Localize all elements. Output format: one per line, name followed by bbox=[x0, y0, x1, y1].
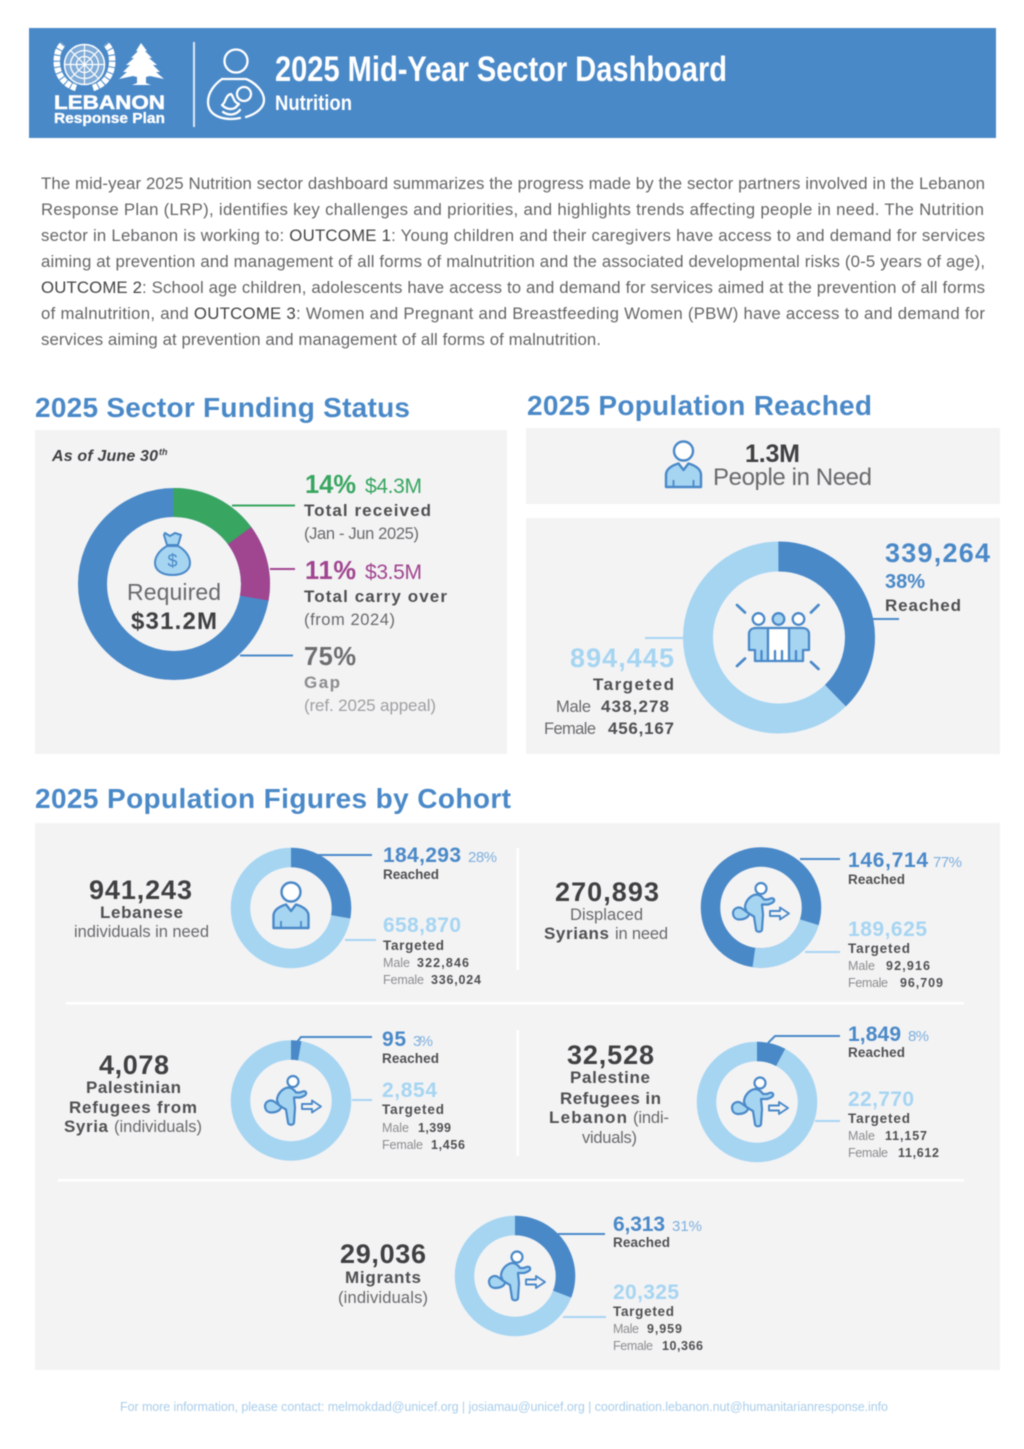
callout: targeted: 894,445 bbox=[570, 643, 674, 673]
cohort: Palestine Refugees in Lebanon bbox=[549, 1023, 939, 1160]
cohort: Palestinian Refugees from Syria: Male bbox=[382, 1121, 409, 1135]
cohort: Lebanese: Targeted bbox=[383, 938, 444, 953]
cohort: Displaced Syrians: Targeted bbox=[848, 941, 910, 956]
panel: cohorts bbox=[35, 823, 1000, 1370]
cohort: Displaced Syrians: Female bbox=[848, 976, 888, 990]
callout: received: 14% bbox=[305, 471, 356, 499]
cohort: Displaced Syrians: 146,714 bbox=[848, 849, 928, 872]
cohort: Palestine Refugees in Lebanon: Reached bbox=[848, 1045, 905, 1060]
intro text block: OUTCOME 2: School age children, adolescents have access to and demand for services aimed at the prevention of all forms bbox=[41, 278, 985, 297]
cohort: Palestine Refugees in Lebanon: Female bbox=[848, 1146, 888, 1160]
cohort: Palestinian Refugees from Syria: 4,078 bbox=[99, 1050, 169, 1080]
cohort: Migrants bbox=[338, 1213, 703, 1353]
cohort: Palestine Refugees in Lebanon: 8% bbox=[908, 1028, 929, 1045]
cohort: Palestinian Refugees from Syria: Female bbox=[382, 1138, 423, 1152]
icon: runner bbox=[733, 883, 789, 932]
donut: Lebanese bbox=[240, 858, 342, 958]
intro text block: sector in Lebanon is working to: OUTCOME 1: Young children and their caregivers have access to and demand for services bbox=[41, 226, 985, 245]
heading: funding status: 2025 Sector Funding Status bbox=[35, 392, 410, 423]
callout: targeted: 438,278 bbox=[601, 697, 669, 716]
callout: targeted: 456,167 bbox=[608, 719, 674, 738]
callout: received: Total received bbox=[304, 501, 431, 520]
intro text block: aiming at prevention and management of all forms of malnutrition and the associated developmental risks (0-5 years of age), bbox=[41, 252, 985, 271]
funding donut chart bbox=[60, 470, 288, 698]
icon: runner bbox=[489, 1252, 545, 1300]
callout: received: (Jan - Jun 2025) bbox=[304, 525, 419, 543]
icon: UN emblem bbox=[57, 44, 112, 88]
callout: reached: 339,264 bbox=[885, 538, 990, 568]
heading: cohorts: 2025 Population Figures by Cohort bbox=[35, 783, 511, 814]
date note suffix: th bbox=[159, 447, 168, 457]
cohort: Palestine Refugees in Lebanon: 11,612 bbox=[898, 1146, 939, 1160]
cohort: Palestinian Refugees from Syria: 2,854 bbox=[382, 1079, 437, 1102]
callout: targeted: Targeted bbox=[593, 675, 674, 694]
cohort: Displaced Syrians: Syrians bbox=[544, 924, 609, 943]
center label: Required bbox=[127, 579, 221, 605]
cohort: Lebanese: Female bbox=[383, 973, 424, 987]
callout: gap: Gap bbox=[304, 673, 340, 692]
cohort: Displaced Syrians: Displaced bbox=[570, 906, 643, 924]
callout: reached: 38% bbox=[885, 571, 925, 593]
footer contact line: For more information, please contact: melmokdad@unicef.org | josiamau@unicef.org | coordination.lebanon.nut@humanitarianresponse.info bbox=[120, 1400, 888, 1414]
cohort: Displaced Syrians: 96,709 bbox=[900, 976, 943, 990]
icon: dollar sign: $ bbox=[167, 551, 178, 571]
cohort: Palestinian Refugees from Syria: 3% bbox=[413, 1033, 433, 1050]
cohort: Palestinian Refugees from Syria: 1,399 bbox=[418, 1121, 451, 1135]
cohort: Lebanese: 658,870 bbox=[383, 914, 461, 937]
cohort: Palestinian Refugees from Syria: 95 bbox=[382, 1028, 406, 1051]
callout: reached bbox=[873, 538, 990, 619]
cohort: Displaced Syrians: 270,893 bbox=[555, 877, 659, 907]
cohort: Palestinian Refugees from Syria bbox=[64, 1028, 465, 1152]
cohort: Displaced Syrians: Reached bbox=[848, 872, 905, 887]
callout: carry over: (from 2024) bbox=[304, 611, 395, 629]
icon: runner bbox=[732, 1078, 788, 1126]
heading: population reached: 2025 Population Reached bbox=[527, 390, 872, 421]
callout: targeted: Male bbox=[556, 698, 591, 716]
cohort: Migrants: 31% bbox=[672, 1218, 702, 1235]
cohort: Lebanese bbox=[74, 844, 497, 987]
callout: gap bbox=[240, 643, 436, 715]
header banner bbox=[29, 28, 996, 138]
cohort: Lebanese: 941,243 bbox=[89, 875, 192, 905]
cohort: Lebanese: 322,846 bbox=[417, 956, 469, 970]
cohort: Palestine Refugees in Lebanon: Lebanon bbox=[549, 1108, 627, 1127]
cohort: Palestine Refugees in Lebanon: Targeted bbox=[848, 1111, 910, 1126]
cohort: Displaced Syrians: 77% bbox=[933, 854, 962, 871]
cohort: Palestine Refugees in Lebanon: Refugees in bbox=[560, 1089, 661, 1108]
panel: people in need bbox=[526, 428, 1000, 504]
intro text block: The mid-year 2025 Nutrition sector dashboard summarizes the progress made by the sector partners involved in the Lebanon bbox=[41, 174, 985, 193]
donut: Palestinian Refugees from Syria bbox=[240, 1050, 342, 1151]
cohort: Migrants: 10,366 bbox=[662, 1339, 703, 1353]
cohort: Lebanese: Male bbox=[383, 956, 410, 970]
logo text: LEBANON bbox=[54, 93, 165, 114]
cohort: Migrants: 29,036 bbox=[340, 1239, 426, 1269]
intro text block: services aiming at prevention and management of all forms of malnutrition. bbox=[41, 330, 601, 349]
cohort: Palestine Refugees in Lebanon: Palestine bbox=[570, 1068, 650, 1087]
cohort: Palestine Refugees in Lebanon: 1,849 bbox=[848, 1023, 901, 1046]
cohort: Palestinian Refugees from Syria: Reached bbox=[382, 1051, 439, 1066]
date note: As of June 30 bbox=[51, 448, 158, 465]
cohort: Displaced Syrians bbox=[544, 844, 962, 990]
cohort: Lebanese: 336,024 bbox=[431, 973, 481, 987]
subtitle: Nutrition bbox=[275, 91, 352, 115]
icon: cedar tree bbox=[119, 43, 164, 85]
intro text block: of malnutrition, and OUTCOME 3: Women and Pregnant and Breastfeeding Women (PBW) have access to and demand for bbox=[41, 304, 985, 323]
callout: carry over: $3.5M bbox=[365, 561, 422, 584]
callout: targeted bbox=[544, 638, 683, 738]
population donut chart bbox=[698, 556, 860, 718]
donut: Displaced Syrians bbox=[698, 844, 824, 971]
divider bbox=[193, 42, 195, 127]
panel: funding status bbox=[35, 430, 507, 754]
intro text block bbox=[41, 174, 985, 349]
callout: reached: Reached bbox=[885, 596, 961, 615]
icon: money bag bbox=[155, 533, 190, 575]
cohort: Migrants: Female bbox=[613, 1339, 653, 1353]
cohort: Palestinian Refugees from Syria: Syria bbox=[64, 1117, 109, 1136]
intro text block: Response Plan (LRP), identifies key challenges and priorities, and highlights trends affecting people in need. The Nutrition bbox=[41, 200, 984, 219]
cohort: Lebanese: individuals in need bbox=[74, 923, 209, 941]
title: 2025 Mid-Year Sector Dashboard bbox=[275, 50, 727, 89]
cohort: Displaced Syrians: 189,625 bbox=[848, 918, 927, 941]
cohort: Palestine Refugees in Lebanon: 22,770 bbox=[848, 1088, 914, 1111]
icon: group of people bbox=[737, 605, 818, 669]
cohort: Palestinian Refugees from Syria: 1,456 bbox=[431, 1138, 465, 1152]
icon: nutrition mother and baby bbox=[208, 50, 264, 119]
panel: population reached bbox=[526, 518, 1000, 754]
cohort: Migrants: Migrants bbox=[345, 1268, 421, 1287]
cohort: Displaced Syrians: Male bbox=[848, 959, 875, 973]
callout: targeted: Female bbox=[544, 720, 596, 738]
cohort: Lebanese: Reached bbox=[383, 867, 439, 882]
cohort: Migrants: 9,959 bbox=[647, 1322, 682, 1336]
people in need label: People in Need bbox=[713, 464, 872, 491]
cohort: Palestine Refugees in Lebanon: Male bbox=[848, 1129, 875, 1143]
cohort: Migrants: Targeted bbox=[613, 1304, 674, 1319]
center value: $31.2M bbox=[131, 608, 217, 635]
callout: received bbox=[232, 471, 431, 543]
cohort: Palestine Refugees in Lebanon: 32,528 bbox=[567, 1040, 654, 1070]
callout: carry over: 11% bbox=[305, 557, 356, 585]
callout: received: $4.3M bbox=[365, 475, 422, 498]
cohort: Palestinian Refugees from Syria: Targeted bbox=[382, 1102, 444, 1117]
cohort: Displaced Syrians: 92,916 bbox=[886, 959, 930, 973]
cohort: Migrants: Reached bbox=[613, 1235, 670, 1250]
people in need value: 1.3M bbox=[745, 440, 800, 468]
donut: Palestine Refugees in Lebanon bbox=[706, 1052, 808, 1152]
cohort: Lebanese: Lebanese bbox=[100, 903, 183, 922]
cohort: Migrants: Male bbox=[613, 1322, 639, 1336]
icon: person bbox=[666, 442, 701, 487]
cohort: Displaced Syrians: in need bbox=[615, 925, 668, 943]
cohort: Palestinian Refugees from Syria: (individuals) bbox=[114, 1118, 202, 1136]
cohort: Palestine Refugees in Lebanon: 11,157 bbox=[885, 1129, 927, 1143]
cohort: Migrants: 6,313 bbox=[613, 1213, 665, 1236]
callout: gap: (ref. 2025 appeal) bbox=[304, 696, 436, 715]
cohort: Palestine Refugees in Lebanon: viduals) bbox=[582, 1129, 637, 1147]
donut: Migrants bbox=[464, 1226, 566, 1326]
icon: person bbox=[274, 882, 308, 928]
icon: runner bbox=[265, 1076, 321, 1125]
callout: gap: 75% bbox=[304, 643, 356, 671]
cohort: Palestine Refugees in Lebanon: (indi- bbox=[633, 1109, 669, 1127]
cohort: Migrants: 20,325 bbox=[613, 1281, 679, 1304]
callout: carry over: Total carry over bbox=[304, 587, 447, 606]
cohort: Palestinian Refugees from Syria: Refugees from bbox=[69, 1098, 197, 1117]
cohort: Migrants: (individuals) bbox=[338, 1289, 428, 1307]
cohort: Lebanese: 184,293 bbox=[383, 844, 461, 867]
callout: carry over bbox=[270, 557, 447, 629]
cohort: Lebanese: 28% bbox=[468, 849, 497, 866]
logo subtitle: Response Plan bbox=[54, 111, 165, 127]
cohort: Palestinian Refugees from Syria: Palestinian bbox=[86, 1078, 181, 1097]
